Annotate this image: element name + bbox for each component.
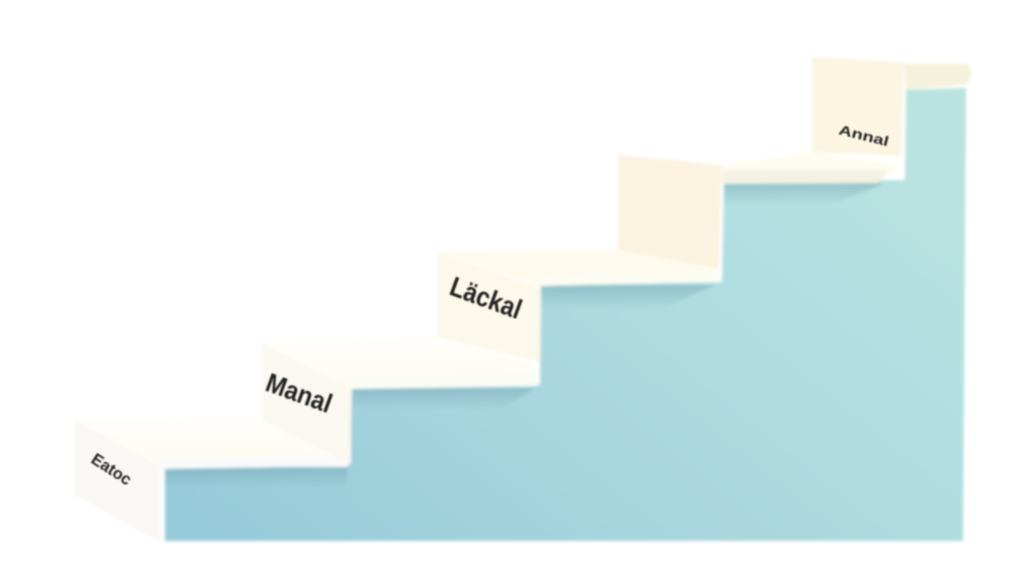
label: step 3: Läckal <box>446 271 526 325</box>
blue wall behind stairs <box>165 88 966 541</box>
step 5: riser <box>812 57 904 156</box>
step 2: side face <box>262 343 351 464</box>
step 3: tread <box>437 249 718 286</box>
step 1: tread <box>75 417 350 469</box>
label: step 1: Eatoc <box>88 449 135 489</box>
step 1: side face <box>75 420 161 543</box>
step 3: side face <box>437 252 540 362</box>
step 4: tread <box>721 152 900 184</box>
label: step 2: Manal <box>262 367 336 419</box>
top ledge <box>904 64 972 90</box>
step 4: riser <box>618 155 721 269</box>
label: step 5: Annal <box>837 121 891 149</box>
step 2: tread <box>262 337 537 389</box>
